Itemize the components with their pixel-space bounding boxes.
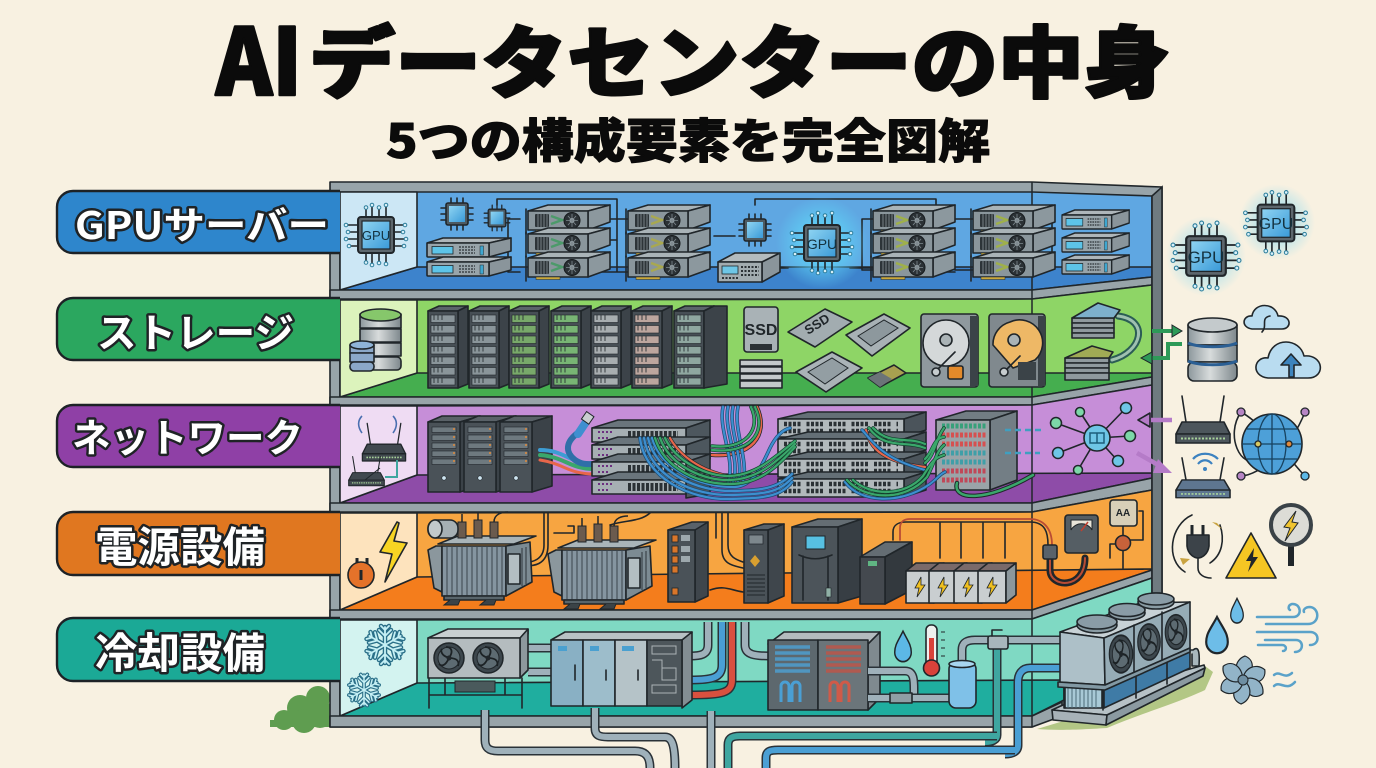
large UPS: [792, 519, 862, 603]
icon: gauge with bolt: [1271, 505, 1311, 566]
GPU cards column 1: [526, 205, 610, 281]
icon: water drops: [1206, 598, 1243, 653]
subtitle: 5つの構成要素を完全図解: [386, 103, 990, 172]
tower body: [1058, 602, 1190, 690]
louvres: [1064, 650, 1190, 710]
icon: power plug: [1172, 515, 1222, 578]
control unit: [718, 253, 780, 282]
storage stacks and cables: [1065, 303, 1139, 380]
cables between cabinets: [710, 513, 743, 592]
icon group: floating GPU chips: GPU: [1188, 248, 1224, 267]
icon: snowflakes: [348, 626, 404, 706]
label: network: ネットワーク: [72, 408, 303, 464]
network switches left: [592, 420, 710, 498]
tilted SSD: SSD: [802, 311, 832, 338]
icon: wind: [1257, 604, 1318, 652]
memory chip: [868, 365, 906, 387]
icon: lightning bolt: [380, 522, 407, 582]
stacked drives: [740, 360, 782, 388]
icon: glowing GPU chip: [776, 197, 868, 289]
floor 1: GPU servers: [330, 192, 1152, 299]
icon: GPU chip in side wall: GPU: [362, 228, 390, 243]
GPU cards column 3: [871, 205, 955, 281]
air chiller: [428, 629, 528, 708]
SSD: [744, 307, 778, 352]
bush behind building: [270, 686, 334, 733]
icon: database: [350, 309, 401, 371]
tower UPS: [744, 524, 784, 603]
floor 5: cooling: [330, 578, 1152, 727]
floor 3 equipment: network: [349, 402, 1136, 499]
socket and junction: AA: [1116, 508, 1130, 519]
valve and pipe down: [985, 630, 1060, 754]
transformer 2: [548, 516, 656, 609]
water tank: [949, 660, 976, 708]
label: GPU servers: GPUサーバー: [75, 195, 329, 250]
floor 1 equipment: GPU servers: [344, 197, 1129, 289]
icon: thermometer: [924, 625, 945, 676]
cooling cabinets: [551, 632, 692, 708]
title: データセンターの中身: [309, 2, 1170, 114]
cooling tower: [1037, 593, 1213, 730]
floor 3: network: [330, 385, 1152, 512]
USB cable: [568, 412, 594, 464]
GPU cards column 4: [971, 205, 1055, 281]
icon: fan: [1218, 656, 1295, 704]
tilted drive 3: [796, 352, 862, 392]
icon: warning triangle: [1226, 533, 1276, 578]
cables tower to switches: [540, 450, 594, 474]
cooling tower pipe stub: [1190, 649, 1199, 666]
floor 4: power: [330, 490, 1152, 619]
floor 2 equipment: storage: [350, 303, 1139, 392]
SSD: SSD: [745, 322, 777, 339]
label: storage: [57, 298, 340, 360]
icon: routers: [1176, 396, 1230, 498]
icon group: floating GPU chips: [1166, 184, 1315, 296]
rack chillers: [768, 632, 880, 710]
transformer 1: [428, 512, 536, 605]
GPU cards column 2: [626, 205, 710, 281]
connection wiring: [497, 199, 1052, 272]
icon: GPU chip in side wall: [344, 203, 408, 267]
tower base: [1052, 665, 1205, 725]
icon: orange plug: [348, 558, 374, 588]
network switches centre: [778, 412, 926, 497]
icon: globe: [1234, 408, 1309, 480]
1U servers: [427, 238, 511, 276]
arrows: storage: [1141, 325, 1182, 364]
storage racks: [428, 306, 727, 388]
pipes below building: [485, 708, 1015, 768]
icon: external database: [1188, 318, 1237, 381]
rack servers right: [1062, 210, 1129, 274]
cables to transformers: [525, 513, 650, 566]
icon: clouds: [1244, 306, 1320, 378]
building frame: [330, 182, 1162, 727]
label: power: [57, 512, 340, 575]
floor 2: storage: [330, 285, 1152, 405]
batteries: [906, 563, 1016, 603]
floor 5 equipment: cooling: [348, 622, 1060, 754]
socket and junction: [1110, 500, 1143, 568]
small chips: [441, 198, 771, 246]
valves and pipes to tank: [868, 640, 1060, 703]
label: cooling: 冷却設備: [95, 620, 265, 681]
icon group: floating GPU chips: GPU: [1259, 216, 1293, 233]
distribution cabinet: [668, 522, 708, 602]
meter: [1065, 515, 1098, 553]
tilted drive 2: [846, 314, 910, 356]
grass: [1037, 666, 1213, 730]
tower fans: [1077, 593, 1187, 673]
icon: network graph: [1050, 402, 1136, 474]
label: storage: ストレージ: [97, 301, 294, 359]
icon: glowing GPU chip: GPU: [807, 236, 837, 252]
icon: routers in side wall: [349, 416, 406, 486]
tower servers: [428, 416, 552, 492]
pipes floor: [528, 622, 770, 695]
tilted SSD: [788, 309, 852, 347]
cable loop to meter: [1043, 545, 1085, 583]
corner post: [1031, 182, 1033, 727]
dashed links: [1005, 430, 1045, 453]
label: cooling: [57, 618, 340, 681]
cable bundles: [640, 407, 1033, 499]
icon: water drop: [895, 631, 911, 662]
label: power: 電源設備: [95, 514, 265, 575]
HDD 1: [921, 314, 978, 387]
HDD 2: [989, 314, 1045, 387]
overhead cable tray: [893, 522, 1048, 558]
small UPS: [860, 542, 912, 604]
floor 4 equipment: power: [348, 500, 1143, 609]
arrows: network: [1137, 413, 1172, 473]
patch panel: [936, 411, 1017, 490]
